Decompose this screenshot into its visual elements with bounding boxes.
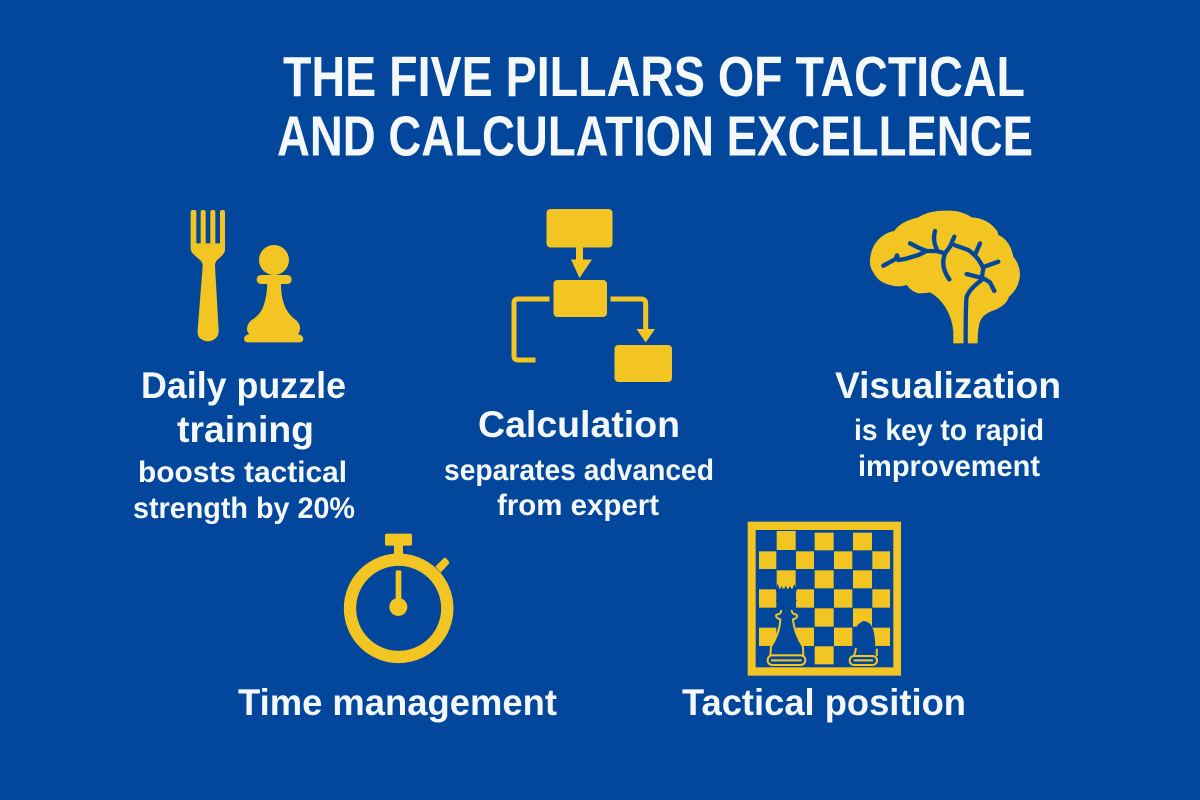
label: visualization: Visualization bbox=[835, 365, 1061, 406]
label: visualization: is key to rapid bbox=[854, 414, 1044, 447]
label: daily puzzle training: strength by 20% bbox=[133, 492, 355, 525]
label: calculation bbox=[444, 404, 714, 522]
label: calculation: from expert bbox=[497, 489, 659, 522]
label: tactical position: Tactical position bbox=[682, 682, 966, 723]
label: daily puzzle training: boosts tactical bbox=[138, 456, 347, 489]
icon: flowchart bbox=[514, 209, 672, 382]
panel: visualization bbox=[835, 211, 1061, 483]
icon: knight piece bbox=[850, 621, 877, 665]
panel: daily puzzle training bbox=[133, 210, 355, 525]
title bbox=[277, 45, 1033, 168]
label: daily puzzle training: Daily puzzle bbox=[141, 365, 346, 406]
label: calculation: Calculation bbox=[478, 404, 680, 445]
icon: queen piece bbox=[768, 583, 805, 665]
icon: brain bbox=[870, 211, 1020, 345]
panel: tactical position bbox=[682, 522, 966, 723]
icon: stopwatch bbox=[350, 534, 449, 657]
panel: calculation bbox=[444, 209, 714, 522]
label: daily puzzle training bbox=[133, 365, 355, 525]
panel: time management bbox=[238, 534, 557, 723]
label: time management: Time management bbox=[238, 682, 557, 723]
label: daily puzzle training: training bbox=[177, 409, 314, 450]
label: visualization bbox=[835, 365, 1061, 483]
icon: chessboard bbox=[748, 522, 901, 676]
title: AND CALCULATION EXCELLENCE bbox=[277, 104, 1033, 168]
label: visualization: improvement bbox=[858, 450, 1040, 483]
icon: fork and pawn bbox=[191, 210, 303, 342]
label: calculation: separates advanced bbox=[444, 454, 714, 487]
title: THE FIVE PILLARS OF TACTICAL bbox=[283, 45, 1025, 109]
